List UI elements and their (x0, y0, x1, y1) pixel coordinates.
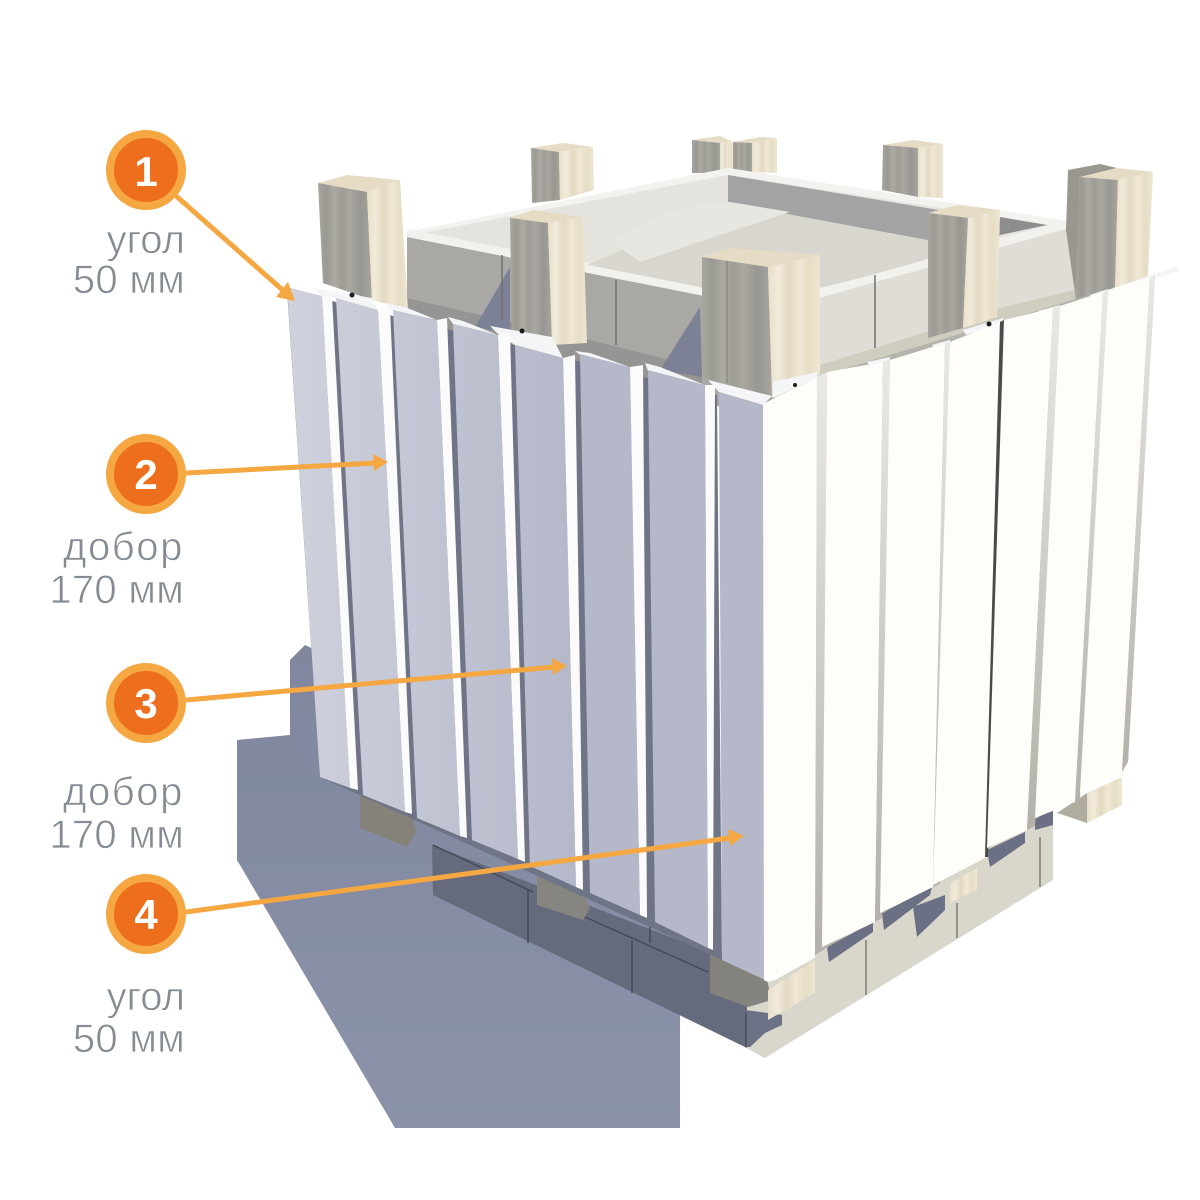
lower timber ends (360, 777, 1122, 1020)
label 4: угол (107, 975, 185, 1019)
label 4: 50 мм (73, 1017, 185, 1061)
left facade panels (287, 287, 765, 980)
label 3 (49, 770, 184, 857)
arrow 1 (175, 195, 295, 301)
back timber posts (531, 136, 943, 203)
rail pieces (313, 266, 1178, 405)
label 3: 170 мм (49, 813, 184, 857)
front timber posts (318, 164, 1153, 398)
label 1: 50 мм (73, 258, 185, 302)
label 2: добор (63, 525, 184, 569)
panel backing (287, 275, 1155, 960)
label 2 (49, 525, 184, 612)
marker 1 (110, 134, 182, 206)
marker 2: 2 (134, 451, 158, 498)
marker 3 (110, 667, 182, 739)
label 1 (73, 218, 185, 302)
ground shadow (237, 645, 680, 1128)
arrow 2 (186, 454, 388, 473)
marker 4: 4 (134, 891, 158, 938)
label 3: добор (63, 770, 184, 814)
label 2: 170 мм (49, 568, 184, 612)
concrete block ring (407, 168, 1076, 420)
arrow 4 (186, 829, 744, 912)
marker 2 (110, 438, 182, 510)
marker 1: 1 (134, 148, 158, 195)
right facade panels (763, 275, 1155, 982)
label 1: угол (107, 218, 185, 262)
marker 4 (110, 878, 182, 950)
label 4 (73, 975, 185, 1061)
marker 3: 3 (134, 680, 158, 727)
fastener details (350, 292, 992, 387)
arrow 3 (186, 658, 567, 700)
foundation block (432, 800, 1053, 1058)
